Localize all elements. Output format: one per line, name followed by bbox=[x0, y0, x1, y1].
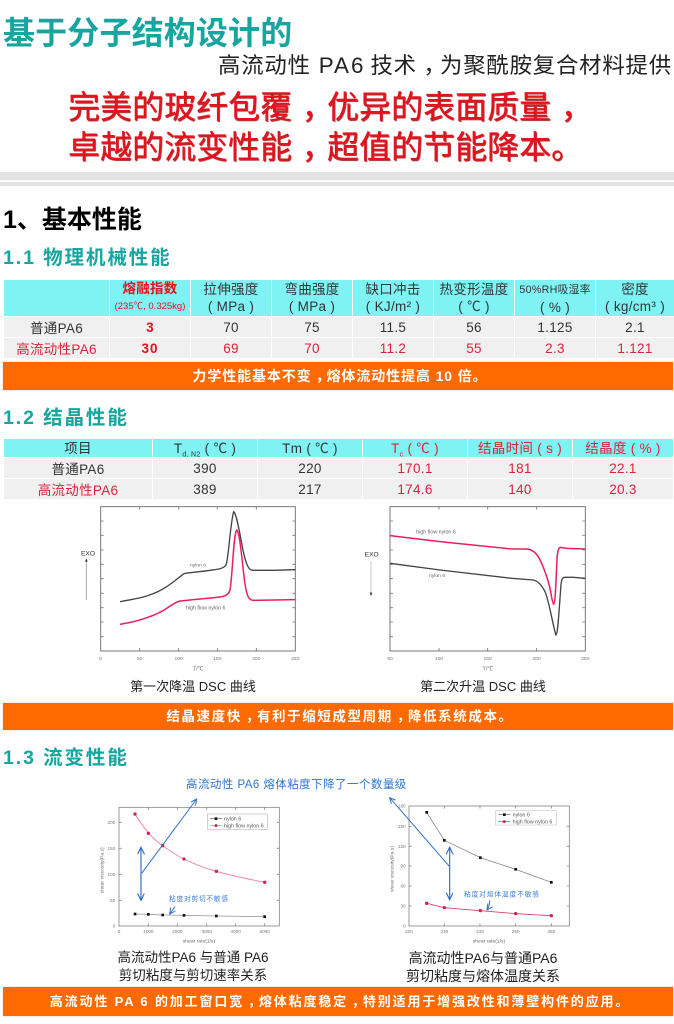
chart: shear viscosity vs shear rate: 50 bbox=[110, 898, 116, 903]
table: mechanical properties: 密度 bbox=[621, 282, 649, 297]
table: crystallization: 390 bbox=[193, 460, 217, 476]
callout bar 1 bbox=[3, 362, 673, 390]
chart: shear viscosity vs melt temperature: 粘度对熔体温度不敏感 bbox=[464, 890, 540, 899]
caption: shear rate relation: 高流动性PA6 与普通 PA6 bbox=[117, 950, 269, 965]
chart: second heating DSC: high flow nylon 6 bbox=[416, 529, 456, 535]
chart: second heating DSC: T/℃ bbox=[482, 665, 493, 672]
table: mechanical properties: 3 bbox=[146, 320, 154, 334]
chart: shear viscosity vs melt temperature: high flow nylon 6 bbox=[513, 819, 552, 825]
table: mechanical properties: 2.1 bbox=[625, 320, 645, 334]
chart: shear viscosity vs melt temperature: 60 bbox=[400, 884, 406, 889]
table: crystallization: 217 bbox=[298, 482, 322, 496]
table: mechanical properties: (235℃, 0.325kg) bbox=[115, 301, 185, 312]
chart: first cooling DSC: nylon 6 bbox=[190, 562, 206, 568]
chart: second heating DSC: 200 bbox=[533, 656, 541, 662]
callout bar 3: 高流动性 PA 6 的加工窗口宽 ，熔体粘度稳定 ，特别适用于增强改性和薄壁构件的应用。 bbox=[50, 994, 630, 1009]
table: crystallization: 174.6 bbox=[397, 482, 433, 496]
table: mechanical properties: ( kg/cm³ ) bbox=[605, 299, 665, 314]
chart: shear viscosity vs melt temperature: 30 bbox=[400, 904, 406, 909]
chart: second heating DSC: nylon 6 bbox=[429, 573, 445, 579]
chart: shear viscosity vs melt temperature: nylon 6 bbox=[513, 812, 530, 818]
caption: shear rate relation bbox=[117, 950, 269, 983]
chart: shear viscosity vs shear rate: 5000 bbox=[259, 929, 270, 934]
chart: shear viscosity vs melt temperature bbox=[390, 798, 569, 945]
chart: shear viscosity vs melt temperature: shear viscosity(Pa.s) bbox=[390, 846, 396, 892]
chart: second heating DSC: EXO bbox=[365, 552, 379, 559]
chart: shear viscosity vs shear rate: 0 bbox=[118, 929, 121, 934]
table: crystallization bbox=[4, 439, 673, 499]
chart: shear viscosity vs melt temperature: 120 bbox=[398, 844, 406, 849]
caption: melt temperature relation bbox=[406, 950, 560, 984]
table: crystallization: 389 bbox=[193, 482, 217, 496]
chart: first cooling DSC: 150 bbox=[213, 656, 222, 662]
callout bar 3 bbox=[3, 987, 673, 1016]
table: crystallization: 20.3 bbox=[609, 482, 637, 496]
heading 1.2: 1.2 结晶性能 bbox=[3, 407, 129, 429]
table: mechanical properties: 55 bbox=[466, 340, 482, 356]
table: mechanical properties: 熔融指数 bbox=[122, 281, 178, 296]
chart: shear viscosity vs shear rate: high flow nylon 6 bbox=[224, 823, 264, 829]
chart: first cooling DSC: EXO bbox=[81, 550, 95, 557]
table: mechanical properties bbox=[4, 280, 674, 358]
chart: shear viscosity vs shear rate: 1000 bbox=[143, 929, 154, 934]
table: crystallization: 结晶度 ( % ) bbox=[585, 440, 661, 456]
chart: shear viscosity vs shear rate: shear rate(1/s) bbox=[183, 939, 216, 945]
chart: shear viscosity vs melt temperature: 180 bbox=[398, 804, 406, 809]
chart: shear viscosity vs shear rate: 粘度对剪切不敏感 bbox=[169, 894, 229, 903]
chart: second heating DSC bbox=[365, 507, 590, 672]
table: mechanical properties: ( ℃ ) bbox=[458, 299, 490, 314]
table: mechanical properties: 11.2 bbox=[380, 340, 406, 356]
table: mechanical properties: 弯曲强度 bbox=[284, 282, 340, 297]
callout bar 2: 结晶速度快 ，有利于缩短成型周期 ，降低系统成本。 bbox=[166, 709, 514, 724]
table: mechanical properties: 75 bbox=[304, 320, 320, 334]
chart: first cooling DSC: high flow nylon 6 bbox=[186, 605, 226, 611]
title: 基于分子结构设计的 bbox=[3, 15, 292, 51]
table: crystallization: 高流动性PA6 bbox=[38, 483, 118, 498]
red headline bbox=[68, 89, 593, 165]
chart: second heating DSC: 50 bbox=[387, 656, 393, 662]
chart: shear viscosity vs shear rate: 3000 bbox=[201, 929, 212, 934]
heading 1.1: 1.1 物理机械性能 bbox=[3, 247, 172, 269]
caption: second heating: 第二次升温 DSC 曲线 bbox=[420, 679, 546, 694]
table: crystallization: 220 bbox=[298, 460, 322, 476]
table: mechanical properties: 热变形温度 bbox=[440, 282, 508, 297]
table: mechanical properties: 69 bbox=[223, 340, 239, 356]
chart: shear viscosity vs shear rate: 100 bbox=[108, 872, 116, 877]
double grey divider bbox=[0, 172, 674, 186]
section heading: 1、基本性能 bbox=[3, 206, 142, 234]
callout bar 1: 力学性能基本不变 ，熔体流动性提高 10 倍。 bbox=[192, 368, 488, 384]
heading 1.3: 1.3 流变性能 bbox=[3, 747, 129, 769]
chart: shear viscosity vs melt temperature: 90 bbox=[400, 864, 406, 869]
chart: shear viscosity vs shear rate: 150 bbox=[108, 846, 116, 851]
chart: shear viscosity vs shear rate: shear viscosity(Pa.s) bbox=[100, 847, 106, 893]
chart: first cooling DSC: 250 bbox=[291, 656, 300, 662]
table: mechanical properties: 50%RH吸湿率 bbox=[519, 284, 591, 296]
chart: first cooling DSC: 200 bbox=[252, 656, 261, 662]
chart: shear viscosity vs shear rate: 200 bbox=[108, 820, 116, 825]
chart: second heating DSC: 100 bbox=[435, 656, 443, 662]
chart: second heating DSC: 150 bbox=[484, 656, 492, 662]
table: mechanical properties: ( MPa ) bbox=[289, 299, 335, 314]
table: mechanical properties: 70 bbox=[304, 340, 320, 356]
table: mechanical properties: 拉伸强度 bbox=[203, 282, 259, 297]
chart: first cooling DSC: 50 bbox=[137, 656, 143, 662]
chart: second heating DSC: 250 bbox=[581, 656, 590, 662]
chart: first cooling DSC: T/℃ bbox=[193, 665, 204, 672]
table: crystallization: 170.1 bbox=[397, 460, 433, 476]
chart: shear viscosity vs melt temperature: 220 bbox=[405, 929, 413, 934]
caption: melt temperature relation: 高流动性PA6与普通PA6 bbox=[409, 950, 557, 966]
blue annotation: 高流动性 PA6 熔体粘度下降了一个数量级 bbox=[186, 779, 407, 791]
chart: shear viscosity vs melt temperature: 150 bbox=[398, 824, 406, 829]
chart: shear viscosity vs melt temperature: 250 bbox=[512, 929, 520, 934]
table: crystallization: 结晶时间 ( s ) bbox=[478, 440, 562, 456]
table: mechanical properties: ( KJ/m² ) bbox=[366, 299, 420, 314]
chart: shear viscosity vs shear rate: nylon 6 bbox=[224, 816, 241, 822]
table: crystallization: 22.1 bbox=[609, 460, 637, 476]
chart: shear viscosity vs shear rate bbox=[100, 799, 279, 945]
subtitle: 高流动性 PA6技术 ，为聚酰胺复合材料提供 bbox=[218, 53, 672, 78]
chart: shear viscosity vs melt temperature: 0 bbox=[403, 924, 406, 929]
red headline: 完美的玻纤包覆 ，优异的表面质量 ， bbox=[68, 89, 593, 125]
chart: first cooling DSC: 100 bbox=[175, 656, 183, 662]
table: mechanical properties: 2.3 bbox=[545, 340, 565, 356]
table: mechanical properties: 缺口冲击 bbox=[365, 282, 421, 297]
caption: shear rate relation: 剪切粘度与剪切速率关系 bbox=[119, 968, 267, 983]
red headline: 卓越的流变性能 ，超值的节能降本。 bbox=[68, 129, 583, 165]
table: mechanical properties: 70 bbox=[223, 320, 239, 334]
chart: shear viscosity vs shear rate: 0 bbox=[113, 924, 116, 929]
chart: shear viscosity vs shear rate: 4000 bbox=[230, 929, 241, 934]
table: mechanical properties: ( % ) bbox=[540, 300, 570, 315]
table: mechanical properties: 高流动性PA6 bbox=[16, 342, 97, 357]
table: mechanical properties: 30 bbox=[141, 340, 159, 356]
table: mechanical properties: 普通PA6 bbox=[30, 321, 83, 336]
chart: first cooling DSC: 0 bbox=[99, 656, 102, 662]
chart: shear viscosity vs melt temperature: 230 bbox=[440, 929, 449, 934]
table: mechanical properties: 1.121 bbox=[617, 340, 653, 356]
table: mechanical properties: 56 bbox=[466, 320, 482, 334]
table: mechanical properties: ( MPa ) bbox=[208, 299, 254, 314]
chart: shear viscosity vs melt temperature: 260 bbox=[547, 929, 556, 934]
table: crystallization: 140 bbox=[508, 482, 532, 496]
callout bar 2 bbox=[3, 703, 673, 730]
table: crystallization: Tm ( ℃ ) bbox=[282, 440, 338, 456]
table: mechanical properties: 11.5 bbox=[380, 320, 406, 334]
caption: first cooling: 第一次降温 DSC 曲线 bbox=[130, 679, 256, 694]
caption: melt temperature relation: 剪切粘度与熔体温度关系 bbox=[406, 968, 560, 984]
chart: shear viscosity vs melt temperature: shear rate(1/s) bbox=[473, 939, 506, 945]
chart: shear viscosity vs melt temperature: 240 bbox=[476, 929, 484, 934]
chart: first cooling DSC bbox=[81, 507, 300, 672]
chart: shear viscosity vs shear rate: 2000 bbox=[172, 929, 183, 934]
table: mechanical properties: 1.125 bbox=[537, 320, 573, 334]
table: crystallization: 普通PA6 bbox=[51, 462, 104, 477]
table: crystallization: 项目 bbox=[64, 440, 92, 456]
table: crystallization: 181 bbox=[508, 460, 532, 476]
